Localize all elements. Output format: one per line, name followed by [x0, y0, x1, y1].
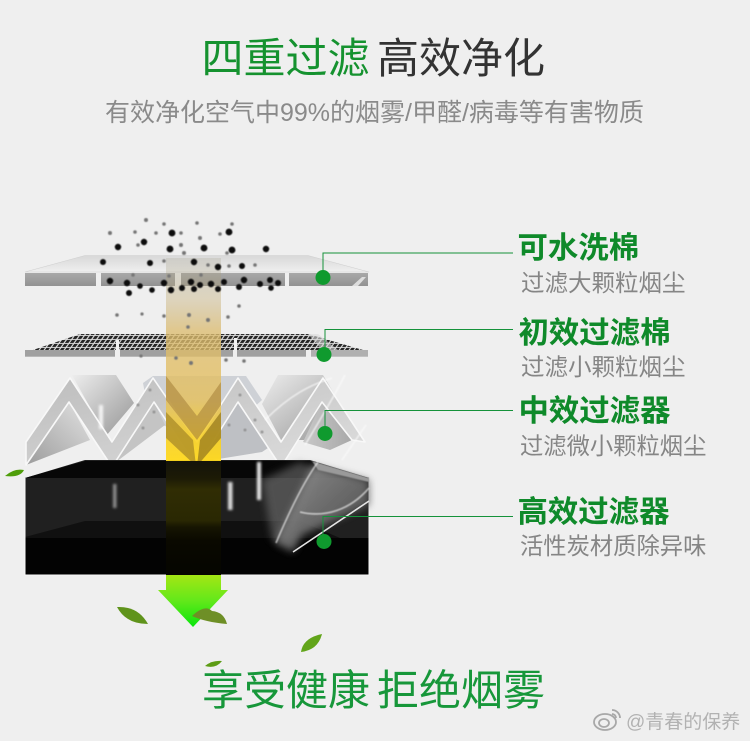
leaf 2 — [117, 607, 148, 624]
bottom slogan: 享受健康 — [202, 667, 370, 714]
label: primary filter — [518, 316, 686, 380]
leaf left — [5, 470, 24, 476]
faint dust particles — [108, 218, 257, 365]
layer 2: primary filter mesh — [25, 334, 368, 357]
layer 3 specks — [136, 388, 264, 434]
leaf 5 — [205, 661, 222, 667]
leaf 3 — [192, 608, 227, 624]
label: high efficiency filter: 高效过滤器 — [518, 495, 669, 529]
callout lines and dots — [316, 253, 513, 549]
dust particles — [100, 229, 281, 296]
filter stack diagram — [5, 218, 513, 667]
leaf 4 — [301, 634, 322, 652]
label: medium filter: 过滤微小颗粒烟尘 — [520, 433, 706, 459]
icon: weibo — [594, 710, 620, 730]
layer 1: washable sponge — [25, 256, 369, 286]
smoke streaks — [265, 375, 366, 460]
layer 4: activated carbon filter — [25, 460, 369, 575]
title: 四重过滤 — [202, 35, 370, 82]
back faces — [72, 375, 134, 436]
label: medium filter: 中效过滤器 — [518, 394, 670, 428]
label: washable sponge: 可水洗棉 — [518, 231, 639, 265]
airflow band — [166, 258, 221, 575]
zigzag band — [26, 378, 365, 467]
label: medium filter — [518, 394, 706, 459]
label: washable sponge — [518, 231, 686, 296]
label: washable sponge: 过滤大颗粒烟尘 — [521, 270, 686, 296]
subtitle: 有效净化空气中99%的烟雾/甲醛/病毒等有害物质 — [105, 99, 644, 127]
smoke in carbon filter — [262, 461, 369, 552]
under faces — [26, 402, 90, 465]
watermark: @青春的保养 — [626, 711, 740, 733]
title: 高效净化 — [377, 35, 545, 82]
label: primary filter: 过滤小颗粒烟尘 — [521, 354, 686, 380]
label: high efficiency filter: 活性炭材质除异味 — [520, 533, 706, 559]
label: primary filter: 初效过滤棉 — [518, 316, 670, 350]
bottom slogan: 拒绝烟雾 — [377, 667, 545, 714]
layer 3: pleated medium filter — [26, 375, 366, 467]
label: high efficiency filter — [518, 495, 706, 559]
green down arrow — [158, 575, 228, 627]
